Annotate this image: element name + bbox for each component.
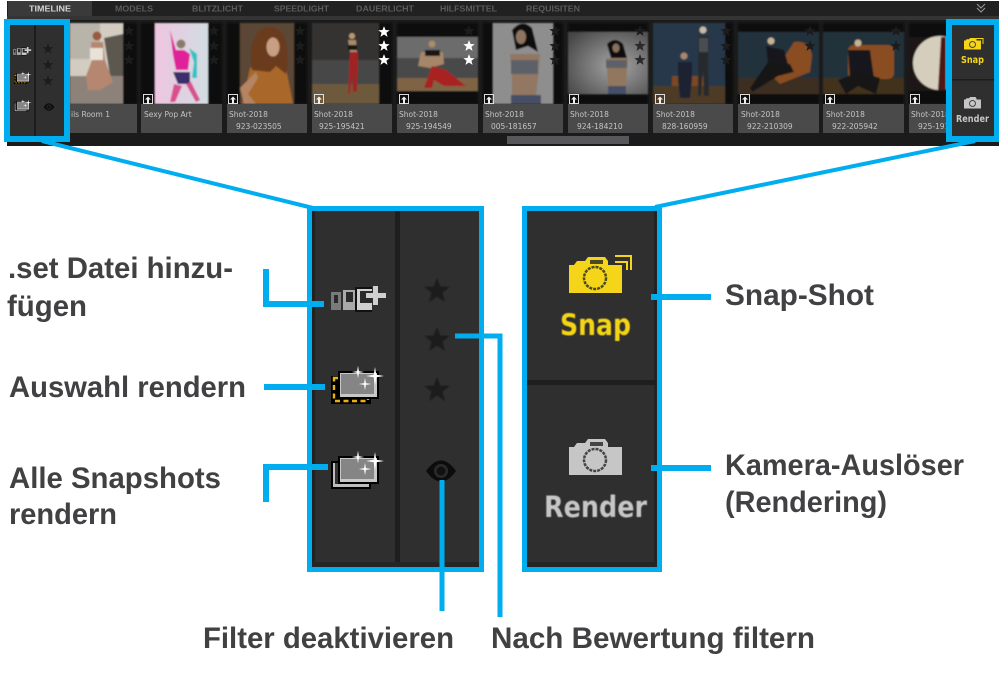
label: Alle Snapshots rendern: rendern	[9, 498, 117, 531]
icon: render selection	[331, 366, 384, 404]
tab row labels: DAUERLICHT	[356, 4, 415, 14]
thumbnail 6	[483, 23, 563, 133]
tab row labels: REQUISITEN	[526, 4, 580, 14]
thumbnail 11: 925-191	[918, 122, 950, 131]
thumbnail 1	[63, 23, 137, 133]
label: Nach Bewertung filtern: Nach Bewertung filtern	[491, 622, 815, 655]
label: .set Datei hinzufuegen: fügen	[7, 290, 87, 323]
thumbnail 6: 005-181657	[491, 122, 537, 131]
thumbnail 4: Shot-2018	[314, 110, 353, 119]
text: Snap: Snap	[560, 308, 631, 342]
thumbnail 7: 924-184210	[577, 122, 623, 131]
label: .set Datei hinzufuegen: .set Datei hinzu-	[8, 252, 233, 285]
label: Kamera-Ausloeser (Rendering): Kamera-Auslöser	[725, 449, 964, 482]
panel: enlarged right toolbar	[524, 208, 660, 570]
thumbnail 10: 922-205942	[832, 122, 878, 131]
tab row labels	[115, 4, 580, 14]
mini panel: right toolbar: Render	[956, 114, 989, 125]
tab row labels: BLITZLICHT	[192, 4, 244, 14]
thumbnail 4	[312, 23, 392, 133]
panel: enlarged left toolbar	[309, 208, 482, 570]
thumbnail 9	[738, 23, 819, 133]
thumbnail 5	[397, 23, 478, 133]
thumbnail 7: Shot-2018	[570, 110, 609, 119]
tab row labels: MODELS	[115, 4, 153, 14]
thumbnail 3: Shot-2018	[229, 110, 268, 119]
mini panel: right toolbar: Snap	[961, 55, 984, 66]
thumbnail 3	[227, 23, 307, 133]
tab: TIMELINE: TIMELINE	[29, 4, 71, 14]
connector: left toolbar to panel	[42, 141, 313, 208]
highlight box: left toolbar	[7, 22, 67, 139]
connector: render all	[266, 467, 328, 502]
connector: rating filter	[455, 336, 500, 617]
icon: add .set file	[331, 286, 386, 312]
icon: collapse chevrons	[977, 4, 985, 12]
thumbnail 8: Shot-2018	[656, 110, 695, 119]
thumbnail 11: Shot-2018	[911, 110, 950, 119]
icon: render camera	[569, 439, 622, 475]
connector: add file	[266, 269, 324, 304]
thumbnail 8	[653, 23, 733, 133]
icon: snap camera	[569, 256, 631, 293]
thumbnail 11	[909, 23, 967, 133]
icon: eye filter off	[426, 460, 456, 482]
thumbnail 1: ils Room 1	[71, 110, 110, 119]
panel: timeline screenshot bar	[7, 1, 999, 146]
label: Auswahl rendern: Auswahl rendern	[9, 371, 246, 404]
scrollbar	[507, 136, 629, 144]
highlight box: right toolbar	[949, 22, 999, 139]
mini panel: left toolbar	[10, 25, 64, 137]
label: Snap-Shot: Snap-Shot	[725, 279, 874, 312]
thumbnail 3: 923-023505	[236, 122, 282, 131]
thumbnail 5: 925-194549	[406, 122, 452, 131]
thumbnail 2	[141, 23, 222, 133]
text: Render: Render	[544, 490, 648, 524]
thumbnail 10: Shot-2018	[826, 110, 865, 119]
connector: right toolbar to panel	[655, 141, 975, 207]
mini panel: right toolbar	[952, 25, 994, 137]
connector: disable filter	[440, 480, 444, 611]
icon: rating stars	[424, 278, 450, 401]
connector: snap-shot	[651, 294, 711, 300]
connector: render	[651, 465, 711, 471]
thumbnail 5: Shot-2018	[399, 110, 438, 119]
thumbnail 4: 925-195421	[319, 122, 365, 131]
thumbnail 7	[568, 23, 648, 133]
thumbnail 6: Shot-2018	[485, 110, 524, 119]
tab: TIMELINE	[8, 1, 92, 16]
connector: render selection	[264, 384, 325, 390]
thumbnail 2: Sexy Pop Art	[144, 110, 192, 119]
thumbnail 10	[823, 23, 904, 133]
tab row labels: SPEEDLIGHT	[274, 4, 330, 14]
label: Kamera-Ausloeser (Rendering): (Rendering)	[725, 486, 887, 519]
label: Filter deaktivieren: Filter deaktivieren	[203, 622, 454, 655]
thumbnail 9: 922-210309	[747, 122, 793, 131]
label: Alle Snapshots rendern: Alle Snapshots	[9, 462, 221, 495]
thumbnail 9: Shot-2018	[741, 110, 780, 119]
icon: render all snapshots	[331, 451, 384, 489]
thumbnail 8: 828-160959	[662, 122, 708, 131]
tab row labels: HILFSMITTEL	[440, 4, 497, 14]
